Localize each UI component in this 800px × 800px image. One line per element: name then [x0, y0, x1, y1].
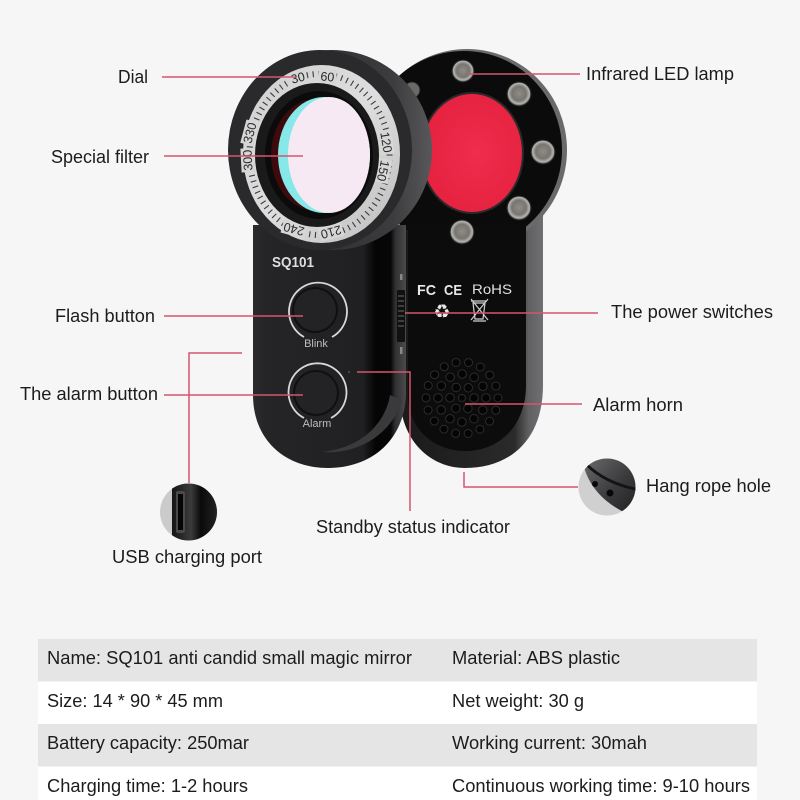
- spec: material: Material: ABS plastic: [452, 648, 620, 668]
- power switch: [397, 274, 405, 354]
- flash button: Blink: [304, 338, 328, 350]
- dial numbers: 30: [289, 70, 307, 87]
- spec: net weight: Net weight: 30 g: [452, 691, 584, 711]
- head side band: [232, 50, 432, 250]
- back body shell: [400, 215, 543, 468]
- certification marks: CE: [444, 282, 462, 299]
- callout: Flash button: Flash button: [55, 306, 155, 326]
- spec: continuous working time: Continuous working time: 9-10 hours: [452, 776, 750, 796]
- callout: Standby status indicator: Standby status indicator: [316, 517, 510, 537]
- dial numbers: 120: [377, 131, 395, 154]
- flash button: [289, 283, 347, 350]
- certification marks: FC: [417, 282, 436, 299]
- model name: SQ101: [272, 254, 314, 271]
- spec: size: Size: 14 * 90 * 45 mm: [47, 691, 223, 711]
- lens: cyan filter: [278, 97, 370, 213]
- dial numbers: 300: [240, 149, 256, 171]
- callout: Hang rope hole: Hang rope hole: [646, 476, 771, 496]
- callout: The alarm button: The alarm button: [20, 384, 158, 404]
- callout: Alarm horn: Alarm horn: [593, 395, 683, 415]
- silver dial ring: [243, 65, 400, 243]
- back body panel: [408, 225, 526, 451]
- red filter lens: [420, 92, 524, 214]
- dial numbers: 240: [282, 219, 306, 238]
- callout: USB charging port: USB charging port: [112, 547, 262, 567]
- callout: Dial: Dial: [118, 67, 148, 87]
- callout: Standby status indicator: [316, 372, 510, 537]
- callout: Hang rope hole: [464, 472, 771, 496]
- dial numbers: 210: [319, 222, 343, 241]
- back head panel: [366, 51, 562, 249]
- certification marks: [417, 282, 512, 323]
- spec: working current: Working current: 30mah: [452, 733, 647, 753]
- specification table: [38, 639, 757, 800]
- table row backgrounds: [38, 639, 757, 800]
- lens: pink filter surface: [288, 97, 370, 213]
- lens barrel: [255, 83, 379, 227]
- callout: USB charging port: [112, 353, 262, 567]
- lens: red inner reflection: [271, 99, 361, 211]
- back head rim: [367, 49, 567, 251]
- device: back view: [366, 49, 567, 468]
- dial numbers: [240, 69, 395, 242]
- alarm horn holes: [426, 362, 498, 434]
- standby indicator: [348, 371, 350, 373]
- head front: [228, 50, 412, 250]
- callout: The power switches: The power switches: [611, 302, 773, 322]
- dial numbers: 150: [374, 159, 392, 183]
- infrared LEDs: [404, 60, 555, 244]
- front body: [253, 225, 406, 468]
- dial tick marks: [250, 74, 390, 235]
- device: front view: [228, 50, 432, 468]
- inset: USB charging port: [160, 484, 217, 540]
- spec: battery capacity: Battery capacity: 250mar: [47, 733, 249, 753]
- dial numbers: 330: [241, 121, 260, 145]
- callout: Special filter: Special filter: [51, 147, 149, 167]
- lower rim shading: [322, 395, 402, 452]
- certification marks: RoHS: [472, 282, 512, 297]
- inset: hang rope hole: [578, 458, 636, 516]
- callout: Infrared LED lamp: Infrared LED lamp: [586, 64, 734, 84]
- certification marks: ♻: [433, 301, 451, 323]
- alarm button: Alarm: [303, 418, 331, 430]
- alarm button: [288, 363, 347, 430]
- spec: charging time: Charging time: 1-2 hours: [47, 776, 248, 796]
- spec: name: Name: SQ101 anti candid small magic mirror: [47, 648, 412, 668]
- dial numbers: 60: [320, 69, 335, 85]
